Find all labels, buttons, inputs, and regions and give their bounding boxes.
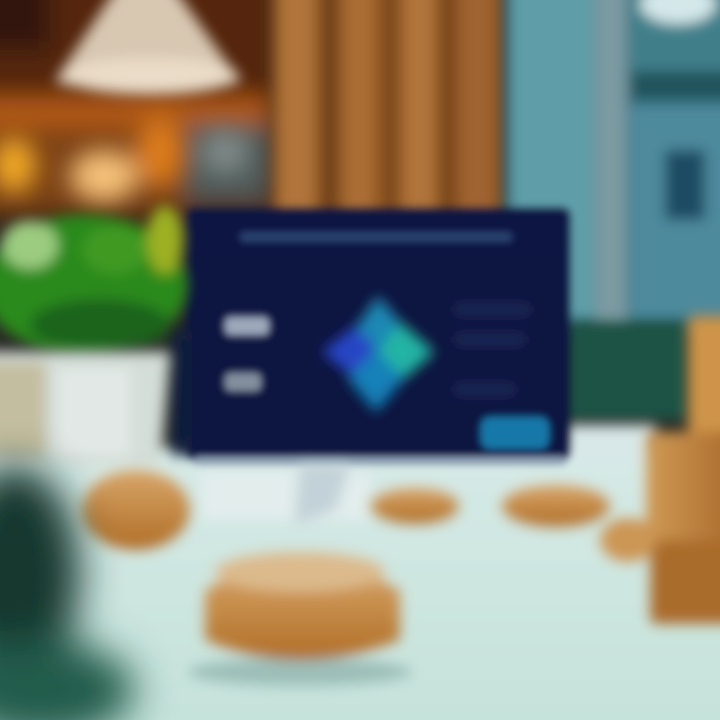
pendant lamp [55, 0, 240, 94]
monitor bezel shadow, left [172, 330, 192, 455]
monitor screen [186, 208, 570, 460]
shelf lights [0, 116, 249, 202]
window [505, 0, 720, 330]
screen button [480, 416, 550, 450]
monitor bottom edge glow [195, 456, 565, 465]
cookie: left [82, 470, 190, 550]
table surface [0, 425, 720, 720]
coin stacks, right [600, 316, 720, 624]
foreground foliage, lower left [0, 465, 135, 720]
screen stats, left [224, 316, 270, 392]
curtain [272, 0, 504, 220]
monitor stand [295, 465, 350, 525]
cookie: centre [371, 488, 459, 524]
plant leaves [0, 206, 187, 355]
cookie: right [502, 485, 610, 527]
diamond logo [322, 296, 434, 412]
screen heading [240, 232, 512, 242]
monitor [172, 208, 570, 465]
dark green backdrop, right of monitor [565, 322, 690, 420]
screen text, right [455, 305, 530, 394]
plant pot [0, 352, 170, 465]
shelves, upper left [0, 0, 280, 220]
cookie: large foreground [188, 552, 412, 686]
